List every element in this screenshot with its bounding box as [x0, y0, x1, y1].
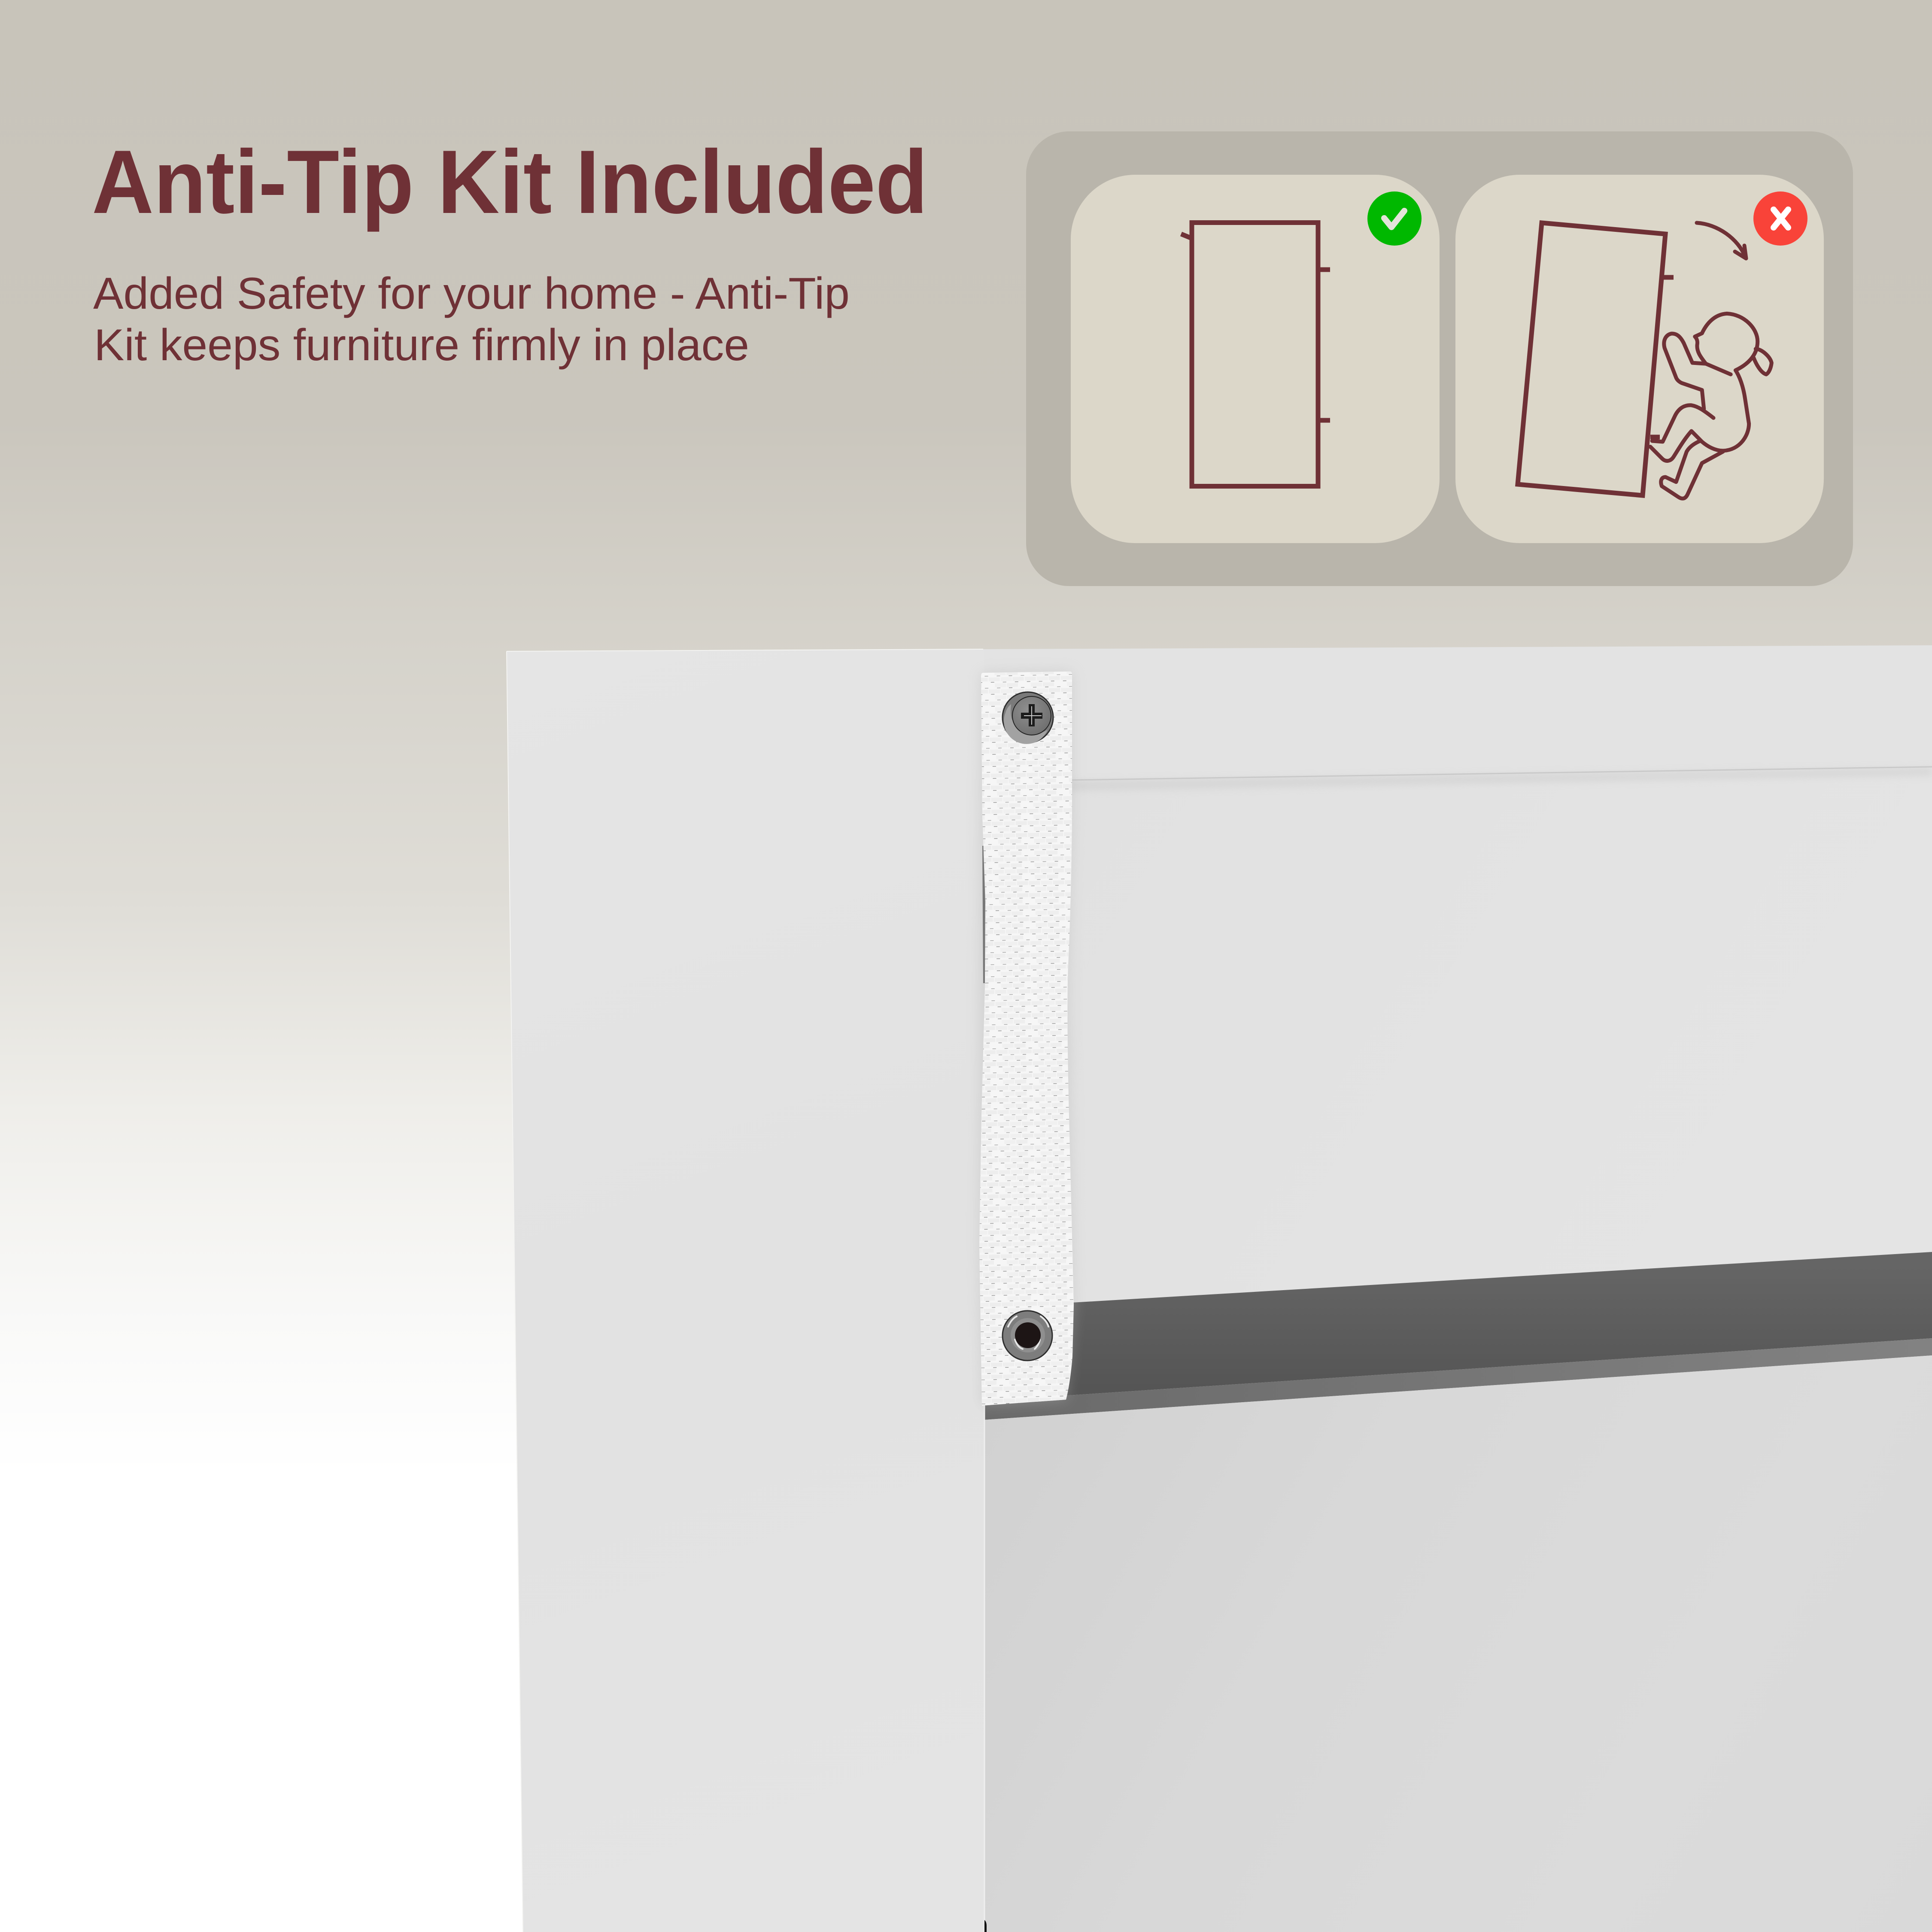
heading: Anti-Tip Kit Included	[92, 131, 928, 232]
text block: heading and description	[92, 131, 928, 370]
cabinet upper back panel	[984, 767, 1932, 1309]
panel: anti-tip comparison	[1026, 131, 1853, 586]
strap soft shadow	[979, 671, 1074, 1406]
anti-tip strap with fasteners	[979, 671, 1074, 1406]
description line 2: Kit keeps furniture firmly in place	[94, 320, 749, 370]
strap weave texture	[979, 671, 1074, 1406]
icon: tilted cabinet	[1518, 223, 1674, 495]
cabinet side panel	[507, 649, 984, 1932]
card: correct, anchored cabinet	[1071, 175, 1440, 543]
dark shelf front	[984, 1252, 1932, 1401]
cabinet top rail	[983, 645, 1932, 781]
strap gap shadow	[982, 846, 987, 983]
side panel edge highlight	[984, 1309, 985, 1932]
icon: red cross badge	[1753, 191, 1807, 246]
arrow: tipping direction	[1697, 223, 1746, 258]
icon: green check badge	[1367, 191, 1422, 246]
side panel outer edge highlight	[507, 649, 983, 1932]
icon: grommet	[1002, 1311, 1052, 1361]
dark gap at bottom of panel	[984, 1920, 987, 1932]
rail shadow	[984, 768, 1932, 793]
icon: screw	[1002, 692, 1053, 744]
lower back panel	[984, 1355, 1932, 1932]
rail edge line	[984, 767, 1932, 781]
strap webbing	[979, 671, 1074, 1406]
furniture: white cabinet corner	[507, 645, 1932, 1932]
card background	[1455, 175, 1824, 543]
card: wrong, tipping cabinet with child	[1455, 175, 1824, 543]
icon: climbing child outline	[1650, 313, 1771, 498]
shelf shadow band	[984, 1338, 1932, 1420]
card background	[1071, 175, 1440, 543]
description line 1: Added Safety for your home - Anti-Tip	[93, 269, 850, 319]
panel backing	[1026, 131, 1853, 586]
icon: upright cabinet with anchors	[1181, 222, 1330, 486]
